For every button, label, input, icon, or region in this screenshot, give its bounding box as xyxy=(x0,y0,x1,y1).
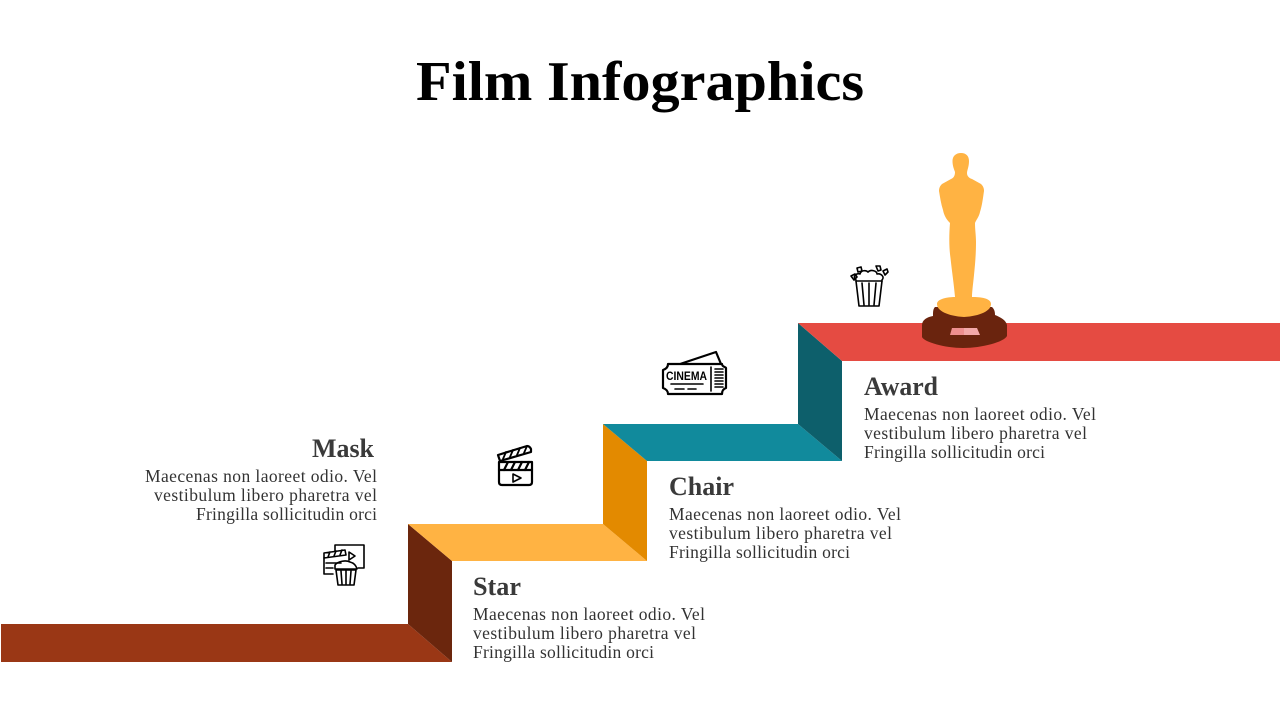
text block: star: Star xyxy=(473,572,521,601)
icon: cinema ticket: CINEMA xyxy=(666,369,707,383)
icon: popcorn xyxy=(851,266,888,306)
step: red top xyxy=(798,323,1280,361)
text block: star: Maecenas non laoreet odio. Vel xyxy=(473,604,705,624)
text block: chair: Chair xyxy=(669,472,734,501)
step: dark brown riser xyxy=(408,524,452,662)
text block: chair: Fringilla sollicitudin orci xyxy=(669,542,850,562)
text block: award: Award xyxy=(864,372,939,401)
icon: film and popcorn xyxy=(324,545,364,585)
text block: chair xyxy=(669,472,901,562)
text block: star xyxy=(473,572,705,662)
text block: award: Fringilla sollicitudin orci xyxy=(864,442,1045,462)
text block: star: vestibulum libero pharetra vel xyxy=(473,623,696,643)
statue figure xyxy=(937,153,991,317)
icon: award statue xyxy=(922,153,1007,348)
step: teal tread xyxy=(603,424,842,461)
text block: award xyxy=(864,372,1096,462)
text block: mask: Maecenas non laoreet odio. Vel xyxy=(145,466,377,486)
text block: mask xyxy=(145,434,377,524)
staircase xyxy=(1,323,1280,662)
step: yellow tread xyxy=(408,524,647,561)
icon: clapperboard xyxy=(498,446,532,485)
base plaque xyxy=(950,328,980,335)
step: orange riser xyxy=(603,424,647,561)
statue base xyxy=(922,307,1007,348)
text block: award: vestibulum libero pharetra vel xyxy=(864,423,1087,443)
text block: chair: vestibulum libero pharetra vel xyxy=(669,523,892,543)
text block: award: Maecenas non laoreet odio. Vel xyxy=(864,404,1096,424)
text block: mask: Mask xyxy=(312,434,375,463)
text block: mask: Fringilla sollicitudin orci xyxy=(196,504,377,524)
icon: cinema ticket xyxy=(663,352,726,394)
text block: mask: vestibulum libero pharetra vel xyxy=(154,485,377,505)
step: rust floor xyxy=(1,624,452,662)
step: dark teal riser xyxy=(798,323,842,461)
title: Film Infographics xyxy=(416,51,864,113)
text block: chair: Maecenas non laoreet odio. Vel xyxy=(669,504,901,524)
text block: star: Fringilla sollicitudin orci xyxy=(473,642,654,662)
